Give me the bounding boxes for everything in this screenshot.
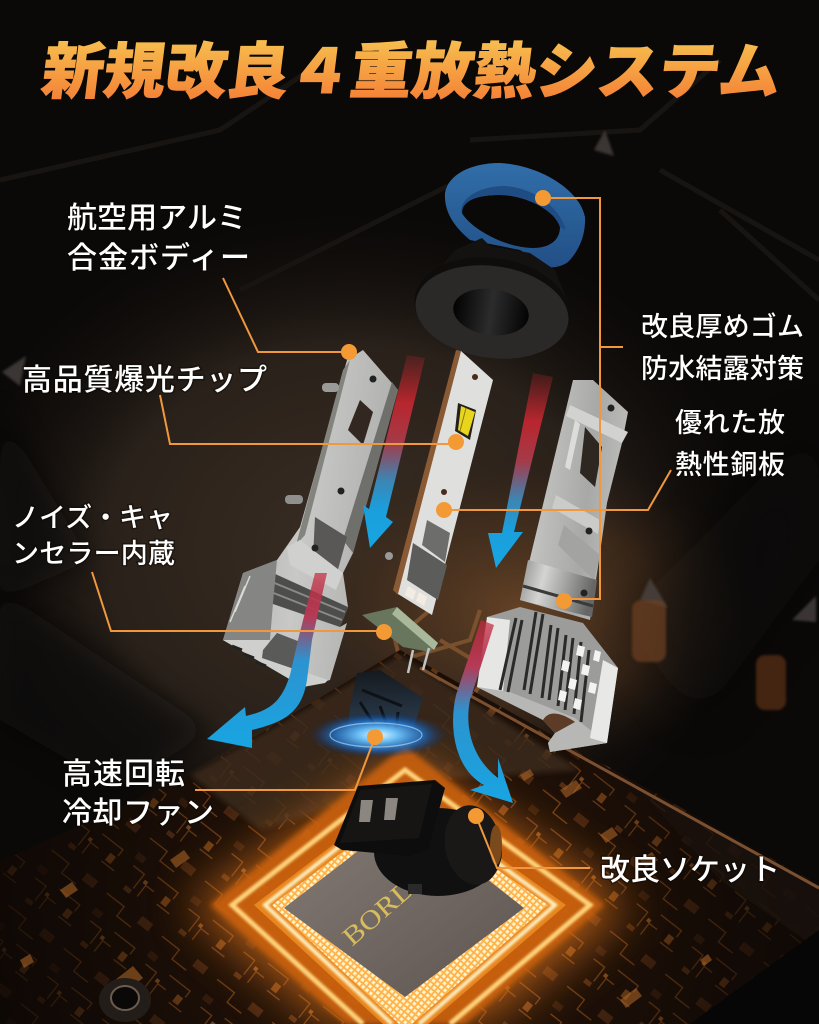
part: noise canceller board xyxy=(362,607,438,673)
label: socket: 改良ソケット xyxy=(600,854,780,887)
label: chip: 高品質爆光チップ xyxy=(22,364,267,397)
board specks xyxy=(20,769,712,1008)
label: fan: 冷却ファン xyxy=(62,797,214,830)
label: noise canceller: ノイズ・キャ xyxy=(12,503,173,533)
heat arrow lower left xyxy=(207,573,327,748)
label: body: 航空用アルミ xyxy=(67,202,247,235)
part: right heatsink half xyxy=(520,380,628,620)
title: 新規改良４重放熱システム xyxy=(38,38,785,106)
leader lines xyxy=(92,198,671,868)
part: cooling fan xyxy=(308,670,448,758)
chip glow xyxy=(190,760,630,1024)
label: fan: 高速回転 xyxy=(62,758,185,791)
heat arrow centre right xyxy=(488,373,553,568)
label: copper plate: 熱性銅板 xyxy=(675,450,785,480)
label: rubber: 改良厚めゴム xyxy=(641,312,804,342)
label: body: 合金ボディー xyxy=(67,242,250,275)
chip: BORDAN xyxy=(337,844,455,952)
label: copper plate: 優れた放 xyxy=(675,408,785,438)
circuit board xyxy=(0,650,819,1024)
part: blue ring xyxy=(445,163,585,267)
label: noise canceller: ンセラー内蔵 xyxy=(12,539,175,569)
chip xyxy=(284,815,524,997)
part: socket xyxy=(334,780,508,896)
marker dots xyxy=(341,190,572,824)
heat arrow lower right xyxy=(453,620,513,803)
part: right fin block xyxy=(477,607,618,752)
label: rubber: 防水結露対策 xyxy=(641,354,804,384)
part: rubber seal xyxy=(408,238,576,368)
heat arrow left upper xyxy=(363,355,425,548)
part: left heatsink half xyxy=(223,350,398,687)
part: LED circuit board xyxy=(385,350,493,615)
